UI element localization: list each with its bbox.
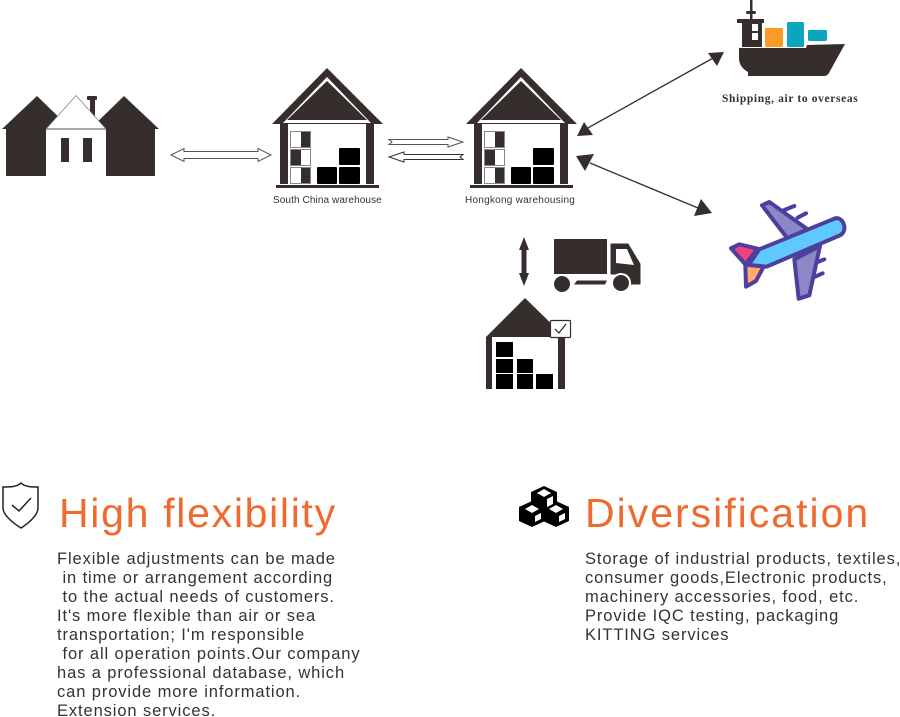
arrow: house to South China warehouse	[171, 148, 271, 162]
arrow: warehouse to plane	[576, 154, 712, 216]
label: shipping: Shipping, air to overseas	[722, 93, 858, 105]
icon: storage warehouse	[486, 298, 570, 389]
icon: South China warehouse	[272, 68, 383, 188]
arrow: from Hongkong warehouse	[389, 152, 463, 162]
arrow: to Hongkong warehouse	[389, 137, 463, 147]
label: South China warehouse: South China warehouse	[273, 195, 382, 206]
icon: shield	[3, 483, 38, 528]
icon: Hongkong warehouse	[466, 68, 577, 188]
text: flexibility description: Flexible adjustments can be made in time or arrangement according to the actual needs of customers. It's more flexible than air or sea transportation; I'm responsible for all operation points.Our company has a professional database, which can provide more information. Extension services.	[57, 550, 360, 717]
label: Hongkong warehousing: Hongkong warehousing	[465, 195, 575, 206]
icon: truck	[554, 239, 640, 293]
icon: airplane	[731, 202, 844, 299]
heading: High flexibility: High flexibility	[59, 490, 337, 536]
text: diversification description: Storage of industrial products, textiles, consumer goods,Electronic products, machinery accessories, food, etc. Provide IQC testing, packaging KITTING services	[585, 550, 900, 644]
heading: Diversification: Diversification	[585, 490, 870, 536]
arrow: warehouse to ship	[577, 52, 724, 136]
arrow: vertical double	[519, 237, 529, 286]
icon: cubes	[519, 486, 569, 527]
icon: house	[2, 96, 159, 176]
icon: cargo ship	[737, 0, 845, 76]
